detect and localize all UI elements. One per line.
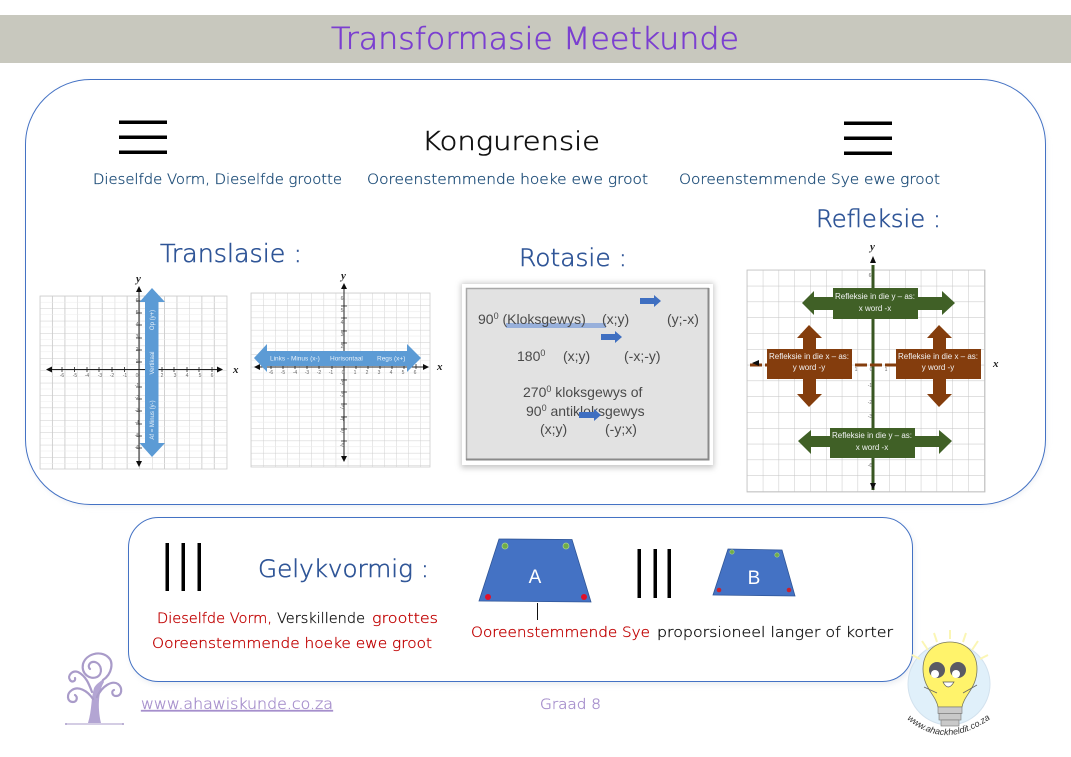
rotation 90 clockwise: (x;y): [602, 311, 629, 327]
chart: reflection grid: 0: [870, 367, 873, 373]
chart: reflection grid: -6: [868, 463, 872, 469]
rotation 180: 180: [517, 348, 540, 364]
chart: reflection grid: -1: [868, 383, 872, 389]
shape: trapezium B: [713, 549, 795, 596]
arrow: reflection in x-axis right: y word -y: [922, 363, 954, 372]
heading: Kongurensie: Kongurensie: [422, 127, 600, 157]
chart: horizontal translation grid: -3: [305, 370, 309, 376]
chart: horizontal translation grid: 2: [341, 344, 344, 350]
chart: horizontal translation grid: 1: [354, 370, 357, 376]
rotation 270: antikloksgewys: [547, 403, 645, 419]
shape: trapezium A: [479, 539, 591, 602]
chart: horizontal translation grid: y: [339, 270, 346, 282]
chart: vertical translation grid: 1: [136, 359, 139, 365]
chart: vertical translation grid: -2: [135, 395, 139, 401]
text: same shape different sizes: Dieselfde Vorm,: [157, 611, 272, 627]
rotation 270: 0: [542, 403, 547, 413]
link: website: www.ahawiskunde.co.za: [141, 695, 333, 713]
arrow: reflection in x-axis right: [896, 325, 981, 407]
arrow: reflection in y-axis top: x word -x: [859, 304, 891, 313]
chart: vertical translation grid: [40, 273, 239, 469]
rotation 270: 270: [523, 384, 546, 400]
chart: horizontal translation grid: 5: [402, 370, 405, 376]
chart: vertical translation grid: 2: [161, 373, 164, 379]
text: corresponding sides proportional: Ooreenstemmende Sye: [471, 625, 650, 641]
arrow: [601, 331, 622, 343]
text: corresponding sides proportional: proporsioneel langer of korter: [657, 625, 893, 641]
chart: horizontal translation grid: -6: [269, 370, 273, 376]
chart: horizontal translation grid: -3: [340, 405, 344, 411]
arrow: vertical blue: Op (y+): [150, 310, 156, 330]
rotation 180: (x;y): [563, 348, 590, 364]
rotation 90 clockwise: (y;-x): [667, 311, 699, 327]
icon: congruent sign right: [844, 122, 892, 155]
chart: vertical translation grid: -6: [60, 373, 64, 379]
chart: vertical translation grid: 6: [211, 373, 214, 379]
chart: horizontal translation grid: -2: [317, 370, 321, 376]
arrow: reflection in y-axis bottom: x word -x: [856, 443, 888, 452]
arrow: horizontal blue: [254, 344, 421, 372]
chart: vertical translation grid: 4: [186, 373, 189, 379]
chart: vertical translation grid: -4: [135, 420, 139, 426]
chart: vertical translation grid: 0: [136, 373, 139, 379]
chart: horizontal translation grid: -5: [340, 429, 344, 435]
rotation 270: kloksgewys of: [551, 384, 643, 400]
chart: reflection grid: 1: [855, 367, 858, 373]
rotation 270: 0: [546, 384, 551, 394]
chart: reflection grid: x: [992, 358, 999, 370]
chart: horizontal translation grid: -5: [281, 370, 285, 376]
icon: congruent sign left: [119, 120, 167, 154]
chart: horizontal translation grid: -1: [329, 370, 333, 376]
text: corresponding angles: Ooreenstemmende hoeke ewe groot: [367, 172, 648, 188]
rotation 90 clockwise: (Kloksgewys): [499, 311, 586, 327]
chart: horizontal translation grid: -6: [340, 443, 344, 449]
arrow: reflection in y-axis top: Refleksie in die y – as:: [835, 292, 915, 301]
icon: light bulb mascot: [908, 630, 990, 736]
arrow: [579, 409, 601, 421]
arrow: vertical blue: Af = Minus (y-): [150, 400, 156, 440]
panel: congruence and transformations: [26, 80, 1046, 506]
chart: vertical translation grid: y: [134, 273, 141, 285]
chart: vertical translation grid: 6: [136, 298, 139, 304]
rotation 90 clockwise: 90: [478, 311, 494, 327]
chart: horizontal translation grid: -2: [340, 393, 344, 399]
heading: Rotasie: Rotasie :: [519, 244, 627, 272]
arrow: [640, 295, 661, 307]
text: same shape same size: Dieselfde Vorm, Dieselfde grootte: [93, 172, 342, 188]
text: same shape different sizes: groottes: [372, 611, 438, 627]
chart: horizontal translation grid: 5: [341, 308, 344, 314]
panel: rotation rules: [461, 283, 714, 468]
chart: vertical translation grid: -5: [135, 433, 139, 439]
chart: reflection grid: 1: [885, 367, 888, 373]
chart: vertical translation grid: -3: [98, 373, 102, 379]
rotation 270: (x;y): [540, 421, 567, 437]
rotation 180: (-x;-y): [624, 348, 661, 364]
arrow: reflection in x-axis right: Refleksie in die x – as:: [898, 352, 978, 361]
chart: vertical translation grid: 3: [174, 373, 177, 379]
chart: reflection grid: [747, 241, 999, 492]
icon: tree logo: [65, 653, 124, 725]
chart: vertical translation grid: -5: [73, 373, 77, 379]
chart: vertical translation grid: -1: [123, 373, 127, 379]
chart: vertical translation grid: -3: [135, 408, 139, 414]
line: side marker: [537, 603, 538, 620]
text: corresponding angles equal: Ooreenstemmende hoeke ewe groot: [152, 636, 432, 652]
rotation 180: 0: [540, 348, 545, 358]
arrow: horizontal blue: Regs (x+): [377, 356, 405, 362]
chart: horizontal translation grid: 3: [378, 370, 381, 376]
title: Transformasie Meetkunde: [331, 22, 739, 57]
chart: horizontal translation grid: -1: [340, 381, 344, 387]
chart: reflection grid: y: [868, 241, 875, 253]
rotation 180: [517, 331, 661, 364]
arrow: reflection in y-axis bottom: [798, 428, 952, 458]
chart: vertical translation grid: 4: [136, 322, 139, 328]
chart: vertical translation grid: -4: [85, 373, 89, 379]
chart: vertical translation grid: -2: [110, 373, 114, 379]
chart: reflection grid: -2: [868, 400, 872, 406]
rotation 90 clockwise: [478, 295, 699, 328]
chart: reflection grid: 6: [869, 273, 872, 279]
text: corresponding sides proportional: [471, 625, 893, 641]
chart: vertical translation grid: 5: [136, 310, 139, 316]
arrow: reflection in x-axis left: y word -y: [793, 363, 825, 372]
chart: vertical translation grid: 2: [136, 347, 139, 353]
chart: horizontal translation grid: [251, 270, 443, 467]
arrow: vertical blue: [140, 288, 165, 457]
heading: Gelykvormig: Gelykvormig :: [258, 555, 429, 583]
panel: similarity: [128, 518, 914, 684]
shape: trapezium A: A: [529, 567, 542, 588]
shape: trapezium B: B: [748, 568, 760, 589]
chart: vertical translation grid: x: [232, 364, 239, 376]
text: same shape different sizes: [157, 611, 438, 627]
text: corresponding sides: Ooreenstemmende Sye ewe groot: [679, 172, 940, 188]
chart: vertical translation grid: -1: [135, 383, 139, 389]
icon: similar sign left: [166, 543, 201, 591]
chart: vertical translation grid: 3: [136, 334, 139, 340]
chart: horizontal translation grid: 6: [414, 370, 417, 376]
chart: vertical translation grid: -6: [135, 445, 139, 451]
chart: horizontal translation grid: -4: [293, 370, 297, 376]
title band: [0, 15, 1071, 63]
arrow: horizontal blue: Links - Minus (x-): [270, 356, 320, 362]
chart: horizontal translation grid: x: [436, 361, 443, 373]
chart: horizontal translation grid: 0: [342, 370, 345, 376]
heading: Refleksie: Refleksie :: [816, 205, 941, 233]
arrow: reflection in y-axis bottom: Refleksie in die y – as:: [832, 431, 912, 440]
chart: horizontal translation grid: 4: [390, 370, 393, 376]
chart: horizontal translation grid: -4: [340, 417, 344, 423]
arrow: vertical blue: Vertikaal: [150, 351, 156, 375]
icon: light bulb mascot: www.ahackheldit.co.za: [908, 716, 990, 736]
arrow: reflection in x-axis left: [767, 325, 852, 407]
chart: reflection grid: -3: [868, 414, 872, 420]
rotation 270: [523, 384, 645, 437]
icon: similar sign right: [638, 549, 671, 598]
chart: horizontal translation grid: 3: [341, 332, 344, 338]
chart: vertical translation grid: 5: [199, 373, 202, 379]
text: grade: Graad 8: [540, 697, 601, 713]
text: same shape different sizes: Verskillende: [277, 611, 365, 627]
chart: horizontal translation grid: 6: [341, 296, 344, 302]
chart: horizontal translation grid: 4: [341, 320, 344, 326]
rotation 270: 90: [526, 403, 542, 419]
rotation 270: (-y;x): [605, 421, 637, 437]
rotation 90 clockwise: 0: [494, 311, 499, 321]
arrow: horizontal blue: Horisontaal: [330, 356, 363, 362]
chart: horizontal translation grid: 2: [366, 370, 369, 376]
arrow: reflection in x-axis left: Refleksie in die x – as:: [769, 352, 849, 361]
arrow: reflection in y-axis top: [802, 288, 955, 319]
heading: Translasie: Translasie :: [160, 239, 302, 268]
